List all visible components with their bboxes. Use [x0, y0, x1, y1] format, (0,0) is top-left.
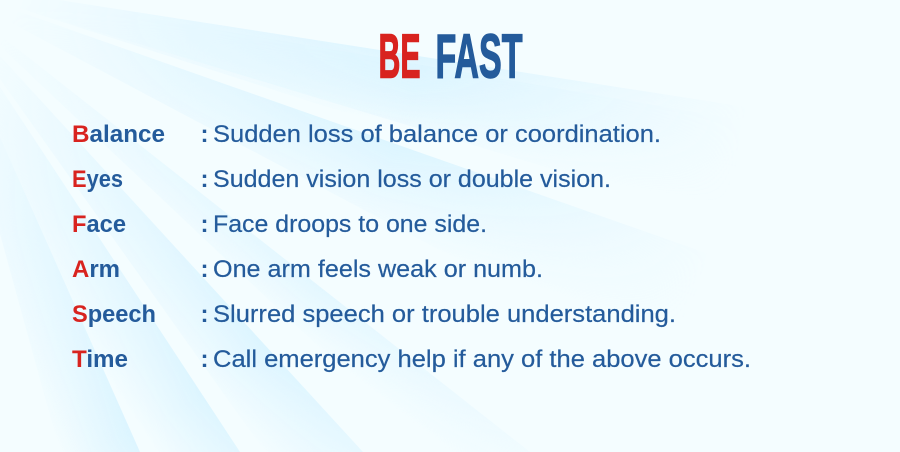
- row: Time: Time: [72, 346, 128, 373]
- row: Face: [72, 211, 487, 238]
- background panel with rays: [4, 10, 634, 452]
- row: Time: :: [200, 346, 208, 373]
- row: Arm: Arm: [72, 256, 120, 283]
- row: Speech: Slurred speech or trouble understanding.: [213, 301, 676, 328]
- row: Eyes: Eyes: [72, 166, 123, 193]
- row: Arm: :: [200, 256, 208, 283]
- row: Arm: [72, 256, 543, 283]
- title: FAST: [436, 22, 523, 92]
- row: Balance: Sudden loss of balance or coordination.: [213, 121, 661, 148]
- row: Speech: :: [200, 301, 208, 328]
- row: Eyes: Sudden vision loss or double vision.: [213, 166, 611, 193]
- row: Balance: Balance: [72, 121, 165, 148]
- title: BE: [378, 22, 420, 92]
- row: Time: Call emergency help if any of the above occurs.: [213, 346, 751, 373]
- row: Speech: Speech: [72, 301, 156, 328]
- row: Face: :: [200, 211, 208, 238]
- title: [378, 22, 523, 92]
- row: Face: Face: [72, 211, 126, 238]
- row: Face: Face droops to one side.: [213, 211, 487, 238]
- row: Arm: One arm feels weak or numb.: [213, 256, 543, 283]
- row: Balance: :: [200, 121, 208, 148]
- row: Eyes: :: [200, 166, 208, 193]
